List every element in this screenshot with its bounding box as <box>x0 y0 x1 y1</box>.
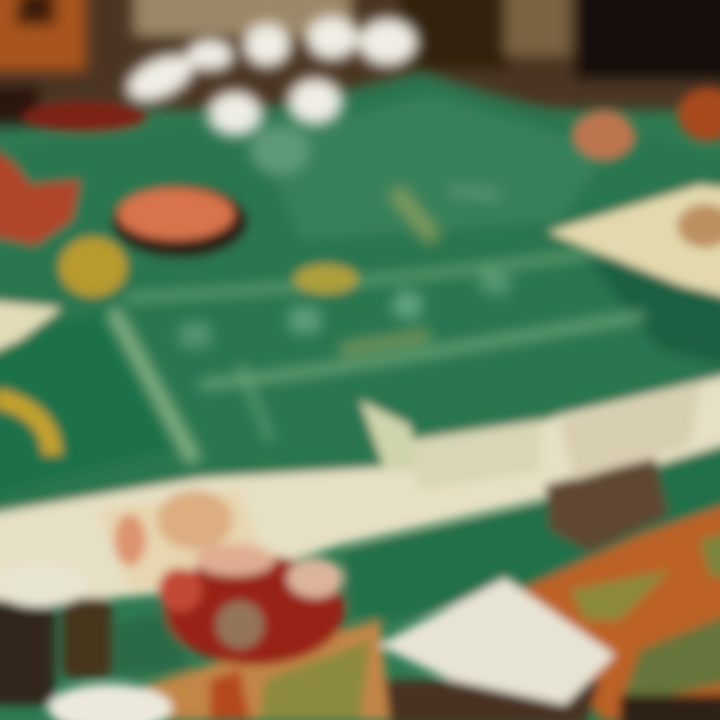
stack: dark chips bottom left <box>0 563 112 705</box>
object: red cards on the left <box>0 145 80 245</box>
object: orange chip top right <box>574 89 720 159</box>
card: cream sheet on the left <box>0 300 62 358</box>
lower band: green felt strip <box>110 445 720 675</box>
carpet: orange and green pattern bottom right <box>130 500 720 720</box>
marker: yellow arc on the left <box>0 398 52 455</box>
card: cream sheet on the right <box>548 185 720 300</box>
object: yellow ball <box>59 237 127 297</box>
stack: white chips at the back of the table <box>119 16 418 175</box>
table markings: pale felt lines and betting boxes <box>112 190 645 462</box>
object: red item top left <box>23 102 147 132</box>
lower band: cream table rail <box>0 372 720 610</box>
card: white sheet at bottom edge <box>48 684 172 720</box>
stack: brown dice box <box>545 385 700 552</box>
table: green felt surface <box>0 72 720 510</box>
background: room behind the table <box>0 0 720 125</box>
marker: yellow patch on felt <box>294 264 358 294</box>
card stack: white cards bottom centre <box>378 578 615 720</box>
object: orange bowl <box>112 186 248 258</box>
stack: red chips <box>158 544 345 665</box>
